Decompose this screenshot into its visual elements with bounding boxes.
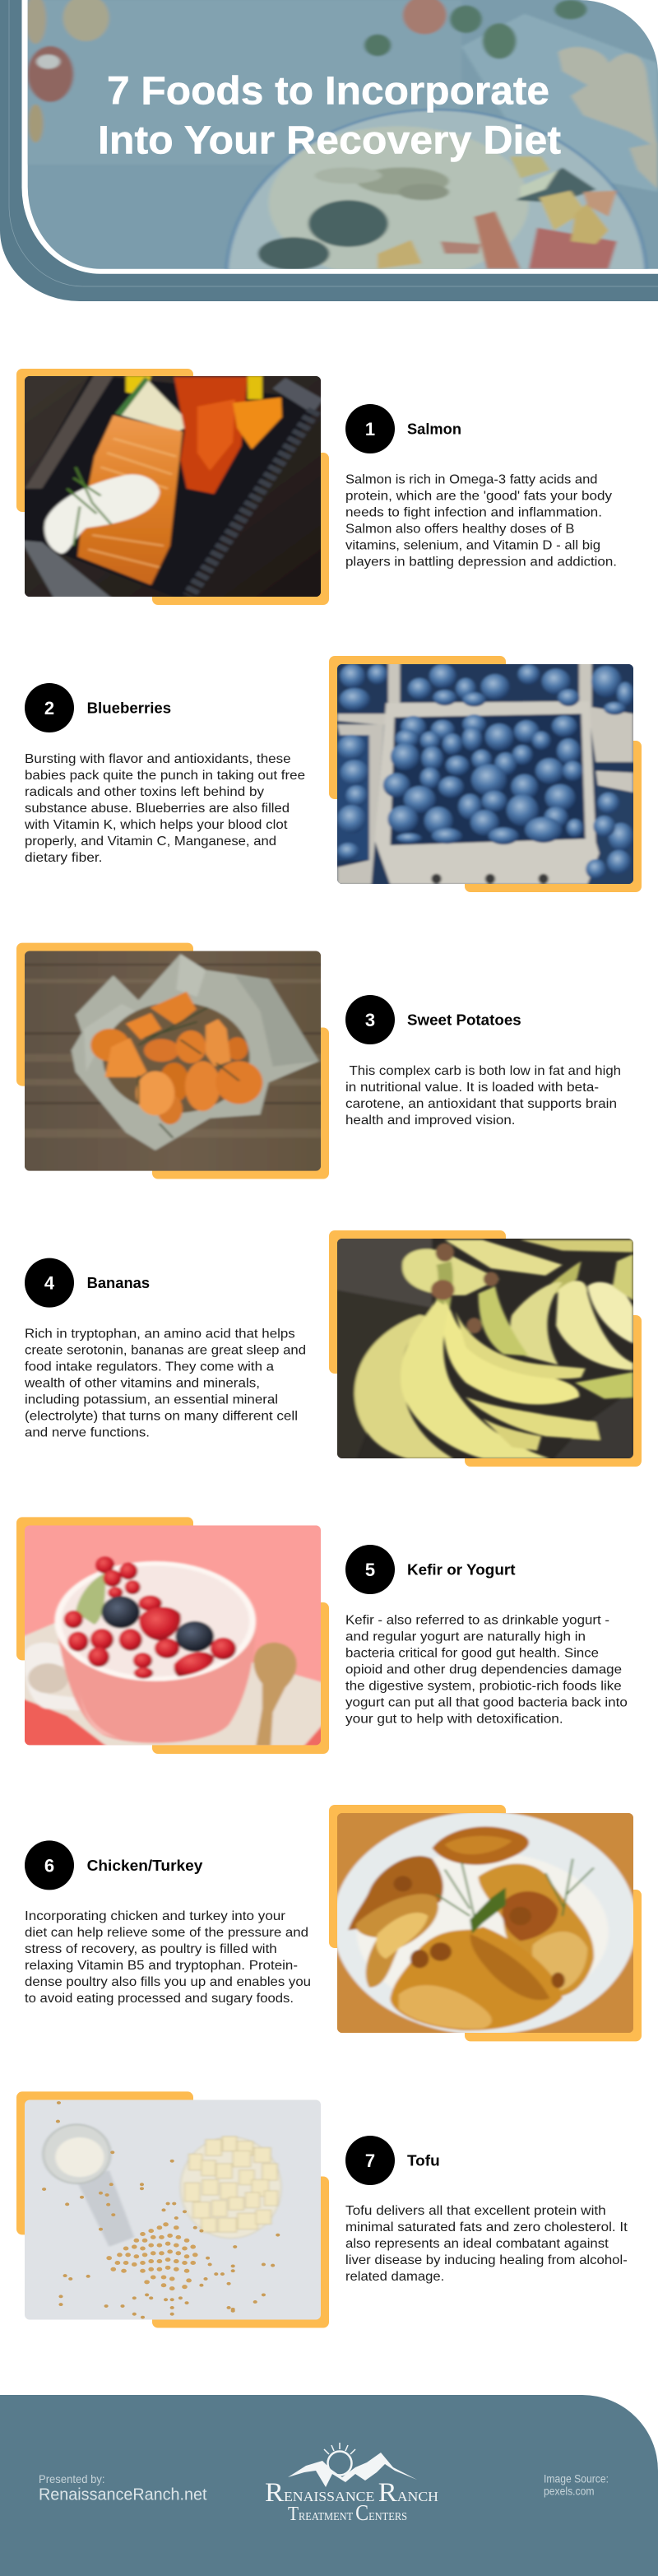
number badge 4: 4 <box>44 1273 55 1294</box>
image source credit: pexels.com <box>544 2485 594 2497</box>
body text: kefir: the digestive system, probiotic-rich foods like <box>345 1680 622 1694</box>
panel: salmon <box>16 369 617 605</box>
body text: chicken/turkey: stress of recovery, as poultry is filled with <box>25 1942 277 1956</box>
body text: blueberries: with Vitamin K, which helps your blood clot <box>24 818 288 832</box>
heading: sweet potatoes: Sweet Potatoes <box>407 1011 521 1029</box>
number badge 7 <box>345 2136 395 2185</box>
number badge 6: 6 <box>44 1855 54 1876</box>
body text: chicken/turkey: diet can help relieve some of the pressure and <box>25 1926 308 1940</box>
photo: salmon on dark plate <box>21 374 327 599</box>
body text: salmon: protein, which are the 'good' fats your body <box>345 490 612 504</box>
body text: blueberries: Bursting with flavor and antioxidants, these <box>25 752 291 766</box>
image source credit <box>544 2472 609 2497</box>
photo frame accents <box>329 1805 642 2041</box>
body text: salmon: players in battling depression and addiction. <box>345 556 617 570</box>
number badge 2 <box>25 683 74 732</box>
body text: chicken/turkey: relaxing Vitamin B5 and tryptophan. Protein- <box>25 1959 298 1973</box>
body text: bananas <box>24 1327 306 1439</box>
photo frame accents <box>329 1230 642 1467</box>
heading: kefir or yogurt: Kefir or Yogurt <box>407 1560 515 1579</box>
body text: kefir <box>345 1614 628 1727</box>
body text: blueberries: radicals and other toxins left behind by <box>25 785 264 799</box>
body text: salmon: Salmon also offers healthy doses of B <box>345 523 574 537</box>
body text: salmon: Salmon is rich in Omega-3 fatty acids and <box>345 473 597 487</box>
body text: blueberries: dietary fiber. <box>25 851 102 865</box>
header photo: food plate with teal overlay <box>28 0 658 269</box>
photo: tofu cubes, soy milk and soybeans <box>25 2100 321 2319</box>
panel: sweet potatoes <box>16 943 621 1179</box>
body text: tofu: Tofu delivers all that excellent protein with <box>345 2204 606 2218</box>
image source credit: Image Source: <box>544 2472 609 2485</box>
body text: tofu: related damage. <box>345 2270 444 2284</box>
number badge 2: 2 <box>44 698 54 718</box>
body text: tofu: minimal saturated fats and zero cholesterol. It <box>345 2220 628 2234</box>
body text: bananas: food intake regulators. They come with a <box>25 1360 274 1374</box>
logo: Renaissance Ranch Treatment Centers: TREATMENT CENTERS <box>288 2500 407 2525</box>
footer <box>0 2395 658 2576</box>
heading: tofu: Tofu <box>407 2151 440 2169</box>
number badge 6 <box>25 1840 74 1890</box>
body text: chicken/turkey: dense poultry also fills you up and enables you <box>25 1975 311 1989</box>
body text: kefir: bacteria critical for good gut health. Since <box>345 1647 599 1661</box>
photo frame accents <box>16 369 329 605</box>
header banner <box>0 0 658 301</box>
panel: tofu <box>16 2091 628 2327</box>
body text: blueberries <box>24 752 305 865</box>
body text: sweet potatoes: carotene, an antioxidant that supports brain <box>345 1097 617 1111</box>
body text: salmon: needs to fight infection and inflammation. <box>345 506 602 520</box>
presented by credit <box>39 2472 207 2504</box>
number badge 5 <box>345 1545 395 1594</box>
body text: tofu: liver disease by inducing healing from alcohol- <box>345 2253 628 2267</box>
body text: kefir: your gut to help with detoxification. <box>345 1713 563 1727</box>
body text: bananas: wealth of other vitamins and minerals, <box>24 1376 260 1390</box>
presented by credit: RenaissanceRanch.net <box>39 2485 207 2504</box>
body text: kefir: Kefir - also referred to as drinkable yogurt - <box>345 1614 609 1628</box>
photo: roasted chicken on a plate <box>333 1811 637 2035</box>
panel: kefir or yogurt <box>16 1517 628 1754</box>
panel: chicken/turkey <box>25 1805 642 2041</box>
body text: blueberries: substance abuse. Blueberries are also filled <box>25 802 290 816</box>
panel: bananas <box>24 1230 642 1467</box>
body text: sweet potatoes: This complex carb is both low in fat and high <box>349 1064 621 1078</box>
panel: blueberries <box>24 656 642 892</box>
body text: bananas: Rich in tryptophan, an amino acid that helps <box>25 1327 295 1341</box>
logo: Renaissance Ranch Treatment Centers: RENAISSANCE RANCH <box>265 2478 438 2508</box>
photo frame accents <box>16 1517 329 1754</box>
body text: kefir: yogurt can put all that good bacteria back into <box>345 1696 628 1710</box>
number badge 1: 1 <box>365 419 375 439</box>
body text: blueberries: properly, and Vitamin C, Manganese, and <box>25 835 276 849</box>
body text: bananas: create serotonin, bananas are great sleep and <box>25 1343 306 1357</box>
photo frame accents <box>329 656 642 892</box>
body text: kefir: opioid and other drug dependencies damage <box>345 1663 622 1677</box>
photo: yogurt cup with berries <box>21 1525 327 1748</box>
number badge 3: 3 <box>365 1010 375 1030</box>
body text: sweet potatoes: in nutritional value. It is loaded with beta- <box>345 1081 599 1095</box>
photo frame accents <box>16 2091 329 2327</box>
body text: tofu: also represents an ideal combatant against <box>345 2237 609 2251</box>
body text: salmon: vitamins, selenium, and Vitamin D - all big <box>345 539 600 553</box>
body text: blueberries: babies pack quite the punch in taking out free <box>25 769 305 783</box>
body text: kefir: and regular yogurt are naturally high in <box>345 1630 586 1644</box>
number badge 4 <box>25 1258 74 1308</box>
heading: bananas: Bananas <box>87 1274 150 1291</box>
body text: chicken/turkey: Incorporating chicken and turkey into your <box>25 1909 286 1923</box>
number badge 1 <box>345 404 395 453</box>
body text: tofu <box>345 2204 628 2284</box>
heading: chicken/turkey: Chicken/Turkey <box>87 1857 203 1874</box>
body text: chicken/turkey: to avoid eating processed and sugary foods. <box>25 1992 294 2006</box>
number badge 7: 7 <box>365 2151 375 2171</box>
body text: salmon <box>345 473 617 570</box>
body text: sweet potatoes: health and improved vision. <box>345 1114 515 1128</box>
body text: sweet potatoes <box>345 1064 621 1128</box>
photo: sweet potatoes on cloth <box>21 949 327 1174</box>
body text: chicken/turkey <box>25 1909 311 2006</box>
body text: bananas: and nerve functions. <box>25 1425 150 1439</box>
body text: bananas: (electrolyte) that turns on many different cell <box>25 1409 298 1423</box>
photo: bunches of bananas <box>336 1236 633 1458</box>
logo: Renaissance Ranch Treatment Centers <box>265 2443 438 2525</box>
number badge 3 <box>345 995 395 1044</box>
title: Into Your Recovery Diet <box>98 119 561 163</box>
photo: blueberries in cartons <box>336 662 636 886</box>
heading: blueberries: Blueberries <box>87 700 171 716</box>
photo frame accents <box>16 943 329 1179</box>
heading: salmon: Salmon <box>407 420 461 438</box>
presented by credit: Presented by: <box>39 2472 105 2485</box>
title <box>98 70 561 163</box>
title: 7 Foods to Incorporate <box>107 70 549 114</box>
number badge 5: 5 <box>365 1560 375 1580</box>
body text: bananas: including potassium, an essential mineral <box>25 1393 278 1407</box>
